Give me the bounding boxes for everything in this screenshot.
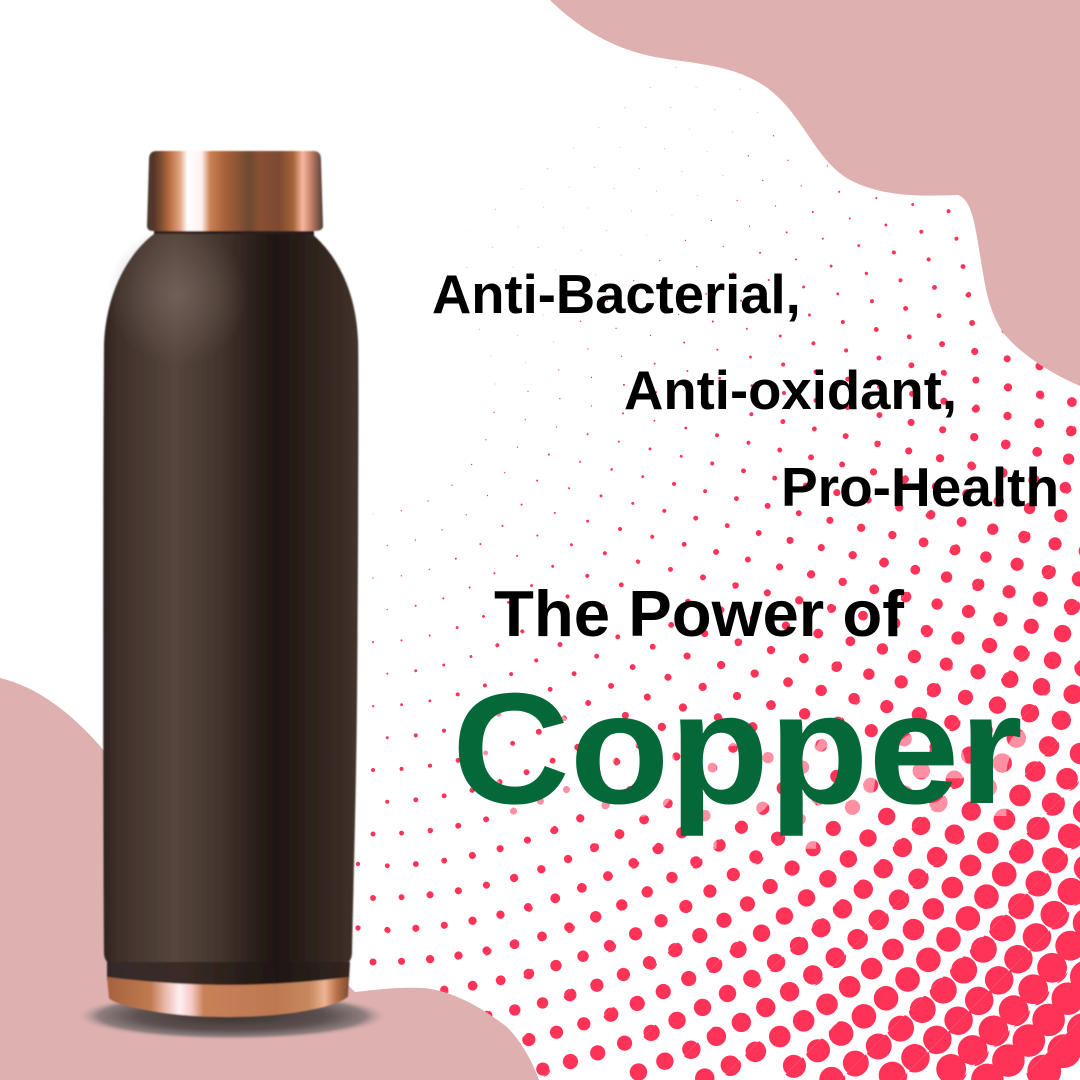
bottle neck bbox=[154, 226, 314, 240]
bottom lip bbox=[107, 962, 350, 986]
halftone dot field bbox=[355, 0, 1080, 1080]
bottle body bbox=[103, 234, 358, 964]
heading: Copper: Copper bbox=[452, 661, 1023, 837]
heading: The Power of: The Power of bbox=[494, 577, 904, 650]
pink blob: top right bbox=[550, 0, 1080, 386]
copper base ring bbox=[107, 977, 349, 1017]
text: Pro-Health: Pro-Health bbox=[781, 456, 1059, 518]
body highlight bbox=[105, 225, 251, 365]
text: Anti-Bacterial: Anti-Bacterial, bbox=[432, 264, 801, 325]
pink blob: bottom left bbox=[0, 678, 539, 1080]
text: Anti-oxidant: Anti-oxidant, bbox=[624, 360, 957, 421]
copper cap bbox=[147, 151, 323, 231]
icon: copper water bottle bbox=[75, 151, 389, 1040]
bottle ground shadow bbox=[75, 992, 389, 1040]
